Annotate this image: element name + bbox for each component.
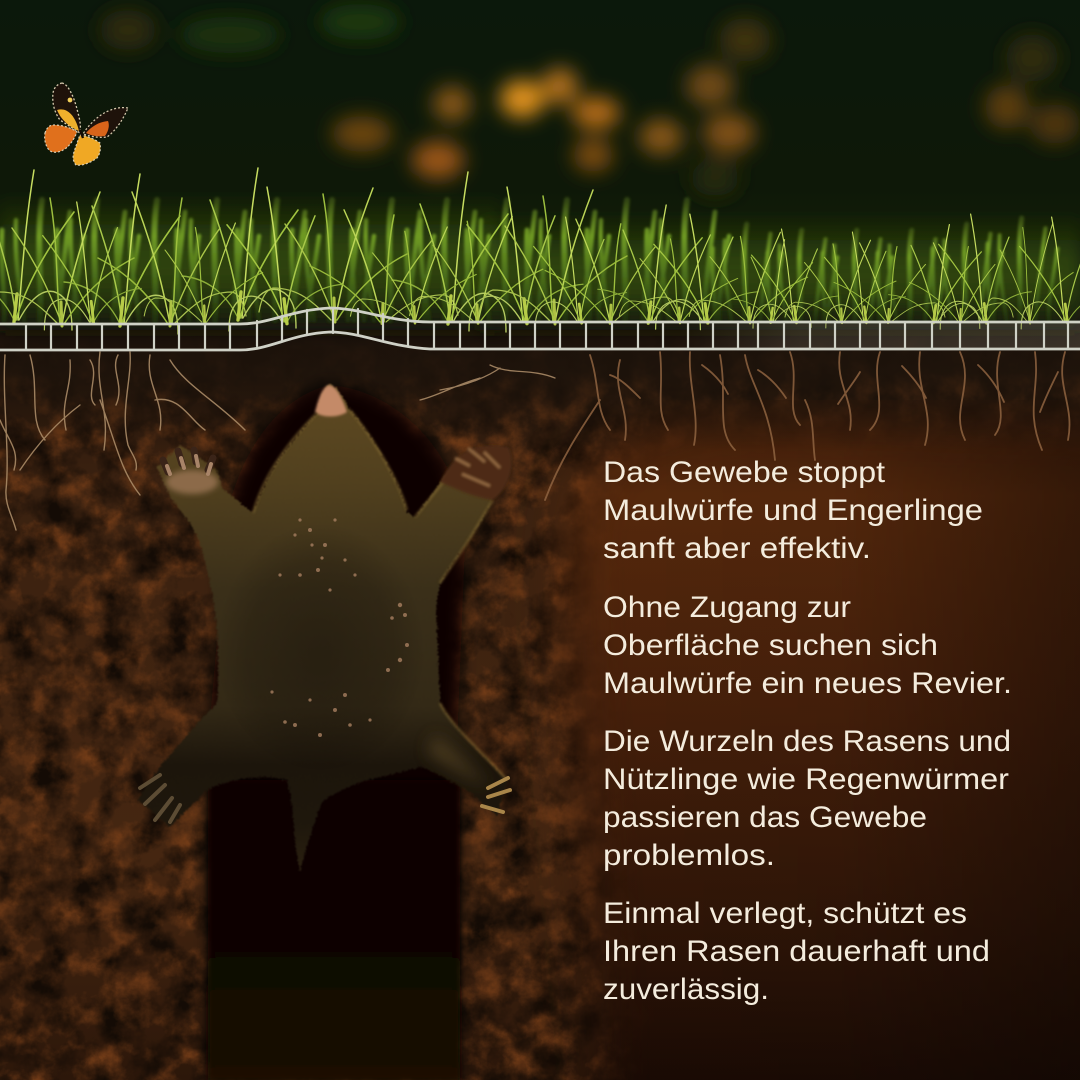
soil: base	[0, 335, 1080, 1080]
hindwing left	[45, 125, 77, 152]
soil: smooth right panel behind text	[500, 400, 1080, 1080]
grass blades	[0, 168, 1080, 334]
soft background blades	[2, 200, 1057, 320]
mole front right paw	[440, 445, 512, 500]
mole back shading	[215, 510, 425, 770]
paragraph 1	[603, 456, 983, 565]
butterfly	[45, 83, 128, 165]
paragraph 2: Maulwürfe ein neues Revier.	[603, 667, 1012, 700]
mole hind leg highlight	[428, 735, 488, 786]
mole nose	[315, 385, 347, 416]
mole	[138, 384, 512, 872]
forewing left	[53, 83, 80, 133]
paragraph 4	[603, 897, 990, 1006]
mole rim light	[253, 410, 507, 780]
mole soil specks	[270, 518, 409, 737]
paragraph 2: Ohne Zugang zur	[603, 591, 851, 624]
wire mesh fabric	[0, 308, 1080, 350]
paragraph 1: Das Gewebe stoppt	[603, 456, 886, 489]
paragraph 4: Ihren Rasen dauerhaft und	[603, 935, 990, 968]
paragraph 1: Maulwürfe und Engerlinge	[603, 494, 983, 527]
text block	[603, 456, 1012, 1006]
right root cluster	[545, 352, 1070, 500]
paragraph 1: sanft aber effektiv.	[603, 532, 871, 565]
paragraph 4: zuverlässig.	[603, 973, 769, 1006]
paragraph 3: passieren das Gewebe	[603, 801, 927, 834]
bokeh lights	[100, 4, 1080, 196]
mole rear claws	[140, 775, 510, 822]
middle root cluster	[420, 365, 555, 400]
background: night sky	[0, 0, 1080, 340]
paragraph 3: problemlos.	[603, 839, 775, 872]
mole front left paw	[163, 450, 218, 494]
left root cluster	[0, 352, 245, 530]
soil: warm texture	[0, 335, 1080, 1080]
topsoil dark strip	[0, 310, 1080, 450]
paragraph 3: Nützlinge wie Regenwürmer	[603, 763, 1009, 796]
roots	[0, 352, 1070, 530]
grass glow band	[0, 195, 1080, 330]
hindwing right	[73, 135, 100, 165]
burrow and tunnel	[208, 385, 466, 1080]
paragraph 4: Einmal verlegt, schützt es	[603, 897, 967, 930]
soil: dark texture	[0, 335, 1080, 1080]
paragraph 3: Die Wurzeln des Rasens und	[603, 725, 1011, 758]
paragraph 3	[603, 725, 1011, 872]
forewing right	[83, 108, 128, 137]
mole body	[138, 384, 507, 872]
paragraph 2	[603, 591, 1012, 700]
paragraph 2: Oberfläche suchen sich	[603, 629, 938, 662]
